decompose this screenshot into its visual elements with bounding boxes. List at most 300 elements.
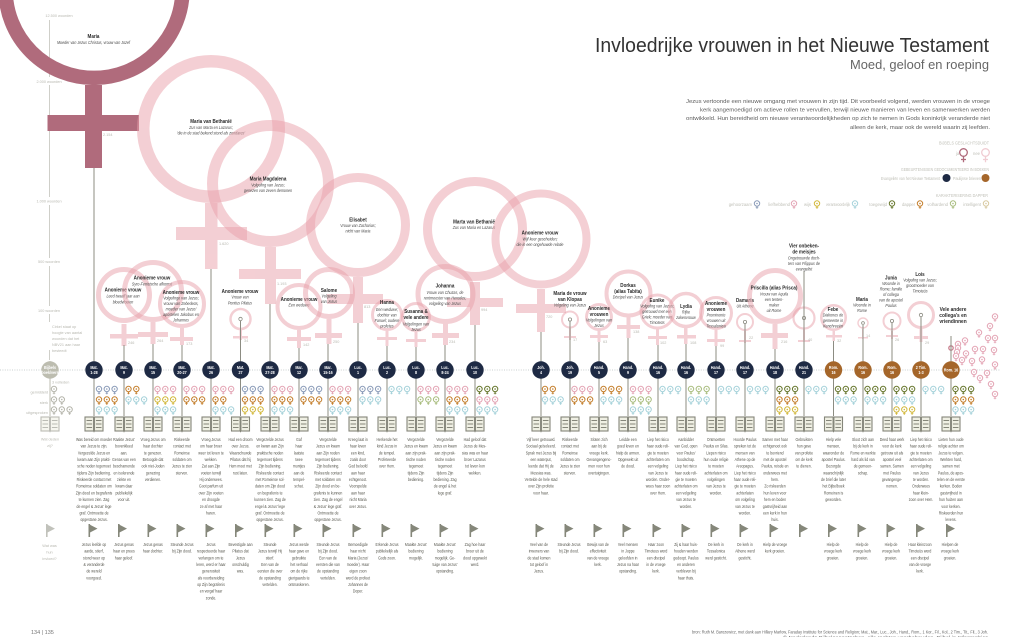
symbol: Salome bbox=[306, 270, 352, 344]
actions text: religie achter om bbox=[938, 443, 964, 449]
symbol: Anonieme vrouwen (Hand. 5): Jezus bbox=[593, 323, 604, 328]
impact text: van de vroege bbox=[909, 561, 932, 567]
symbol: Susanna en vele andere vrouwen: Susanna & bbox=[404, 309, 428, 315]
actions text: schap. bbox=[858, 470, 868, 476]
symbol: Lois: Lois bbox=[915, 272, 925, 278]
impact text: groeien. bbox=[944, 555, 956, 561]
column: Joh. 4: 4 bbox=[540, 370, 543, 375]
actions text: van Jezus te bbox=[676, 497, 696, 502]
actions text: apostel Paulus. bbox=[822, 456, 845, 462]
actions text: de tempel. bbox=[379, 450, 395, 456]
actions text: ze af met haar bbox=[200, 503, 223, 509]
symbol: Anonieme vrouw (Pilatus): Vrouw van bbox=[231, 294, 249, 300]
symbol: Anonieme vrouw (Mat. 9): bloedvloeien bbox=[113, 299, 134, 305]
actions text: genezing bbox=[146, 470, 161, 476]
symbol: Anonieme vrouw (Pilatus): 34 bbox=[244, 339, 248, 343]
impact text: Maakte Jezus' bbox=[434, 541, 456, 547]
symbol: Febe: gemeente in bbox=[823, 318, 844, 323]
actions text: Liep het risico bbox=[910, 436, 932, 442]
actions text: sterven. bbox=[564, 470, 576, 476]
impact text: Hielpen de bbox=[942, 541, 959, 547]
column: Luc. 2 bbox=[375, 346, 410, 561]
actions text: graf. Ontmoette de bbox=[255, 510, 285, 516]
column: Hand. 21: 21 bbox=[802, 370, 807, 375]
symbol: Maria de vrouw van Klopas bbox=[553, 291, 587, 342]
symbol: Anonieme vrouwen (Hand. 17): vrouwen bbox=[707, 307, 725, 313]
actions text: Sloot zich aan bbox=[852, 436, 874, 442]
actions text: tegemoet bbox=[409, 463, 424, 469]
actions text: hem. bbox=[771, 476, 779, 482]
actions text: haar bbox=[296, 443, 303, 449]
actions text: kind Jezus in bbox=[377, 443, 398, 449]
symbol: Maria Magdalena: genezen van zeven demonen bbox=[244, 188, 293, 193]
impact text: de wereld bbox=[86, 568, 102, 574]
actions text: praktische noden bbox=[257, 450, 284, 456]
column: Hand. 21: Hand. bbox=[799, 365, 809, 370]
column: Luc. 10: 10 bbox=[473, 370, 478, 375]
impact text: Johannes de bbox=[348, 581, 369, 587]
actions text: Riskeerde contact met bbox=[77, 476, 112, 482]
word-count axis: hoogte van aantal bbox=[52, 331, 82, 335]
actions text: tegemoet tijdens bbox=[315, 456, 341, 462]
column: Mat. 20-27 bbox=[170, 345, 205, 554]
actions text: Hem moet met bbox=[229, 463, 253, 469]
impact text: Timoteüs werd bbox=[909, 548, 932, 554]
actions text: Liep het risico bbox=[675, 463, 697, 469]
symbol: Vier onbekende meisjes: Ongetrouwde doch- bbox=[788, 255, 821, 261]
legend symbols: ja / nee: ja bbox=[955, 151, 960, 156]
symbol: Maria: 2.154 bbox=[103, 133, 113, 137]
symbol: Johanna: rentmeester van Herodes; bbox=[424, 295, 467, 301]
actions text: over Hem. bbox=[650, 490, 666, 496]
legend heading: bron: GEBEURTENISSEN GEDOCUMENTEERD IN BOEKEN bbox=[901, 167, 989, 172]
symbol: Marta van Bethanië bbox=[428, 182, 522, 325]
actions text: weer tot leven te bbox=[198, 450, 224, 456]
impact text: het verhaal bbox=[290, 561, 308, 567]
actions text: Sprak met Jezus bij bbox=[526, 450, 556, 456]
impact text: groeien. bbox=[885, 555, 897, 561]
symbol: Marta van Bethanië: Marta van Bethanië bbox=[453, 219, 495, 226]
actions text: van God, open bbox=[675, 443, 698, 449]
impact text: zonde. bbox=[206, 595, 216, 601]
actions text: om de kerk bbox=[795, 456, 813, 462]
actions text: te dienen. bbox=[796, 463, 812, 469]
symbol: Febe bbox=[821, 305, 846, 343]
actions text: te worden. bbox=[913, 476, 929, 482]
impact text: groeien. bbox=[856, 555, 868, 561]
actions text: Leidde een bbox=[619, 436, 637, 442]
symbol: Elisabet: nicht van Maria bbox=[346, 228, 371, 234]
column: Mat. 27-28: Mat. bbox=[266, 365, 274, 370]
symbol: Vier onbekende meisjes: 40 bbox=[808, 338, 812, 342]
column: Hand. 9: 9 bbox=[627, 370, 630, 375]
symbol: Junia: of collega bbox=[883, 292, 899, 297]
impact text: vertelden. bbox=[262, 581, 278, 587]
legend: bronnen: Paulijnse brieven bbox=[953, 176, 982, 181]
symbol: Anonieme vrouwen (Hand. 5) bbox=[586, 304, 613, 344]
symbol: Anonieme vrouw (Joh. 4): die in een ongehuwde relatie bbox=[517, 242, 564, 247]
symbol: Anonieme vrouw (Pilatus): Pontius Pilatus bbox=[228, 300, 252, 306]
actions text: Vergezelde bbox=[436, 436, 454, 442]
impact text: mogelijk. bbox=[409, 555, 423, 561]
symbol: Anonieme vrouw (Mat. 20): Anonieme vrouw bbox=[163, 290, 200, 296]
symbol: Anonieme vrouwen (Hand. 17): 99 bbox=[720, 344, 724, 348]
symbol: Maria van Bethanië: 'die in de stad bekend stond als zondares' bbox=[177, 130, 245, 136]
actions text: Pilatus dat hij bbox=[230, 456, 251, 462]
actions text: laatste bbox=[294, 450, 305, 456]
actions text: Sloten zich bbox=[590, 436, 608, 442]
actions text: & Jezus' lege graf. bbox=[314, 503, 342, 509]
word-count axis: woorden dat het bbox=[52, 337, 80, 341]
impact text: Zag hoe haar bbox=[465, 541, 486, 547]
actions text: spreken tot de bbox=[734, 443, 757, 449]
symbol: Lydia: 108 bbox=[690, 341, 696, 345]
symbol: Maria van Bethanië: Zus van Marta en Lazarus; bbox=[188, 125, 234, 130]
actions text: beschamende bbox=[113, 463, 135, 469]
symbol: Junia: Woonde in bbox=[882, 281, 900, 286]
actions text: mensen van bbox=[736, 450, 755, 456]
column: Luc. 8-24 bbox=[433, 345, 468, 574]
actions text: bij de kerk in bbox=[853, 443, 873, 449]
actions text: Raakte Jezus' bbox=[113, 436, 135, 442]
actions text: Jezus te zien bbox=[172, 463, 193, 469]
column: Hand. 17 (Damaris): Hand. bbox=[740, 365, 750, 370]
column: Mat. 26: 26 bbox=[209, 370, 214, 375]
symbol: Anonieme vrouw (Mat. 20): 173 bbox=[186, 342, 192, 346]
actions text: van Jezus te bbox=[706, 483, 726, 489]
actions text: echtgenoot. bbox=[349, 476, 367, 482]
actions text: geworden. bbox=[825, 497, 842, 502]
impact text: kerk. bbox=[652, 568, 660, 574]
actions text: Jezus en kwam bbox=[316, 443, 340, 449]
actions text: tische noden bbox=[406, 456, 426, 462]
impact text: werd. bbox=[471, 561, 479, 567]
actions text: hun gave bbox=[797, 443, 812, 449]
impact text: was. bbox=[237, 568, 244, 574]
impact text: haar dochter. bbox=[143, 548, 163, 554]
actions text: hard als lid van bbox=[851, 456, 875, 462]
symbol: Damaris bbox=[736, 298, 754, 343]
actions text: men voor hun bbox=[588, 463, 610, 469]
column: Hand. 17 (Damaris) bbox=[733, 324, 768, 561]
column: Hand. 5 bbox=[586, 342, 622, 567]
actions text: Was bereid om moeder bbox=[76, 436, 113, 442]
actions text: contact met bbox=[173, 443, 192, 449]
symbol: Maria Magdalena: Maria Magdalena bbox=[250, 176, 286, 183]
impact text: kerk. bbox=[594, 561, 602, 567]
legend column: uitleg iconen: Wat deden bbox=[41, 438, 59, 442]
actions text: hem en boden bbox=[764, 497, 787, 502]
symbol: Hanna: Hanna bbox=[380, 300, 394, 306]
impact text: houden werden bbox=[674, 548, 699, 554]
impact text: bij Zijn dood. bbox=[172, 548, 192, 554]
actions text: en isolerende bbox=[114, 470, 135, 476]
actions text: tempel- bbox=[293, 476, 305, 482]
column: Mat. 15: 15 bbox=[151, 370, 156, 375]
impact text: Hielp de bbox=[885, 541, 898, 547]
symbol: Maria de vrouw van Klopas: Maria de vrouw bbox=[553, 291, 587, 297]
column: Rom. 16 (Junia) bbox=[880, 323, 915, 561]
actions text: van profetie bbox=[795, 450, 814, 456]
impact text: Jezus na haar bbox=[617, 561, 639, 567]
impact text: Veel van de bbox=[530, 541, 549, 547]
actions text: Jezus te zien bbox=[560, 463, 581, 469]
column: Hand. 18: 18 bbox=[773, 370, 778, 375]
actions text: Rome en werkte bbox=[850, 450, 876, 456]
actions text: nicht Maria bbox=[349, 497, 367, 502]
actions text: Riskeerde bbox=[562, 436, 578, 442]
actions text: een volgeling bbox=[648, 463, 669, 469]
actions text: aan haar bbox=[351, 470, 365, 476]
legend column: uitleg iconen: zij? bbox=[47, 444, 53, 448]
actions text: van Jezus te zijn. bbox=[81, 443, 107, 449]
actions text: aan haar bbox=[351, 490, 365, 496]
actions text: over Jezus. bbox=[349, 503, 367, 509]
impact text: vroege kerk bbox=[824, 548, 843, 554]
column: Mat. 27: 27 bbox=[238, 370, 243, 375]
impact text: als voorbereiding bbox=[198, 575, 225, 581]
actions text: Zijn dood en be- bbox=[315, 483, 341, 489]
symbol: Anonieme vrouw (Mat. 15) bbox=[124, 262, 182, 344]
actions text: Liep het risico bbox=[734, 470, 756, 476]
symbol: Hanna: profetes bbox=[379, 323, 394, 329]
symbol: Eunike: 102 bbox=[660, 341, 666, 345]
impact text: Steunde Jezus bbox=[316, 541, 340, 547]
actions text: aan zijn prak- bbox=[406, 450, 427, 456]
actions text: waarschijnlijk bbox=[823, 470, 845, 476]
column: Hand. 17 (vrouwen): 17 bbox=[714, 370, 719, 375]
actions text: Betoogde dat bbox=[143, 456, 164, 462]
actions text: te bevriend bbox=[766, 450, 784, 456]
actions text: kwam daar bbox=[115, 483, 133, 489]
word-count axis: Cirkel staat op bbox=[52, 325, 76, 329]
impact text: Jezus werde bbox=[289, 541, 309, 547]
symbol: Dorkas: Discipel van Jezus bbox=[613, 294, 643, 300]
symbol: Junia: van de apostel bbox=[879, 297, 904, 303]
column: 2 Tim. 1-3: 1-3 bbox=[918, 370, 924, 375]
column: Rom. 16 (vele anderen): Rom. 16 bbox=[944, 367, 959, 373]
actions text: met Romeinse sol- bbox=[255, 476, 285, 482]
actions text: grafenis te kunnen bbox=[314, 490, 343, 496]
actions text: een volgeling bbox=[676, 490, 697, 496]
actions text: engel & Jezus' lege bbox=[255, 503, 286, 509]
symbol: Junia: Rome; familie bbox=[880, 286, 903, 292]
symbol: Maria de vrouw van Klopas: Volgeling van Jezus bbox=[554, 302, 586, 308]
symbol: Maria Magdalena: 1.193 bbox=[277, 282, 287, 286]
impact text: bij Zijn dood. bbox=[559, 548, 579, 554]
symbol: Maria van Bethanië: 1.620 bbox=[219, 242, 229, 246]
actions text: God beloofd bbox=[348, 463, 368, 469]
actions text: bediening. Zag bbox=[433, 476, 457, 482]
actions text: apostel veel bbox=[883, 456, 901, 462]
symbol: Vier onbekende meisjes: de meisjes bbox=[792, 249, 816, 256]
actions text: hun leven voor bbox=[764, 490, 787, 496]
column: Rom. 16 (Febe) bbox=[821, 341, 856, 561]
column: Mar. 15-16: Mar. bbox=[324, 365, 332, 370]
actions text: Zijn bediening. bbox=[317, 463, 339, 469]
symbol: Maria (Rom. 16) bbox=[853, 297, 871, 339]
column: Mat. 15 bbox=[140, 344, 176, 554]
symbol: Susanna en vele andere vrouwen: vele andere bbox=[403, 315, 429, 321]
word-count axis: 500 woorden bbox=[38, 260, 60, 264]
actions text: haar oude reli- bbox=[675, 470, 698, 476]
symbol: Elisabet: Vrouw van Zacharias; bbox=[340, 223, 376, 228]
column: Mat. 1-28 bbox=[76, 168, 117, 581]
symbol: Maria (Rom. 16): 14 bbox=[866, 334, 870, 338]
actions text: broer Lazarus bbox=[464, 456, 486, 462]
impact text: mogelijk. Ge- bbox=[435, 555, 456, 561]
column: Luc. 1: Luc. bbox=[354, 365, 362, 370]
symbol: Maria (Rom. 16): Woonde in bbox=[853, 302, 871, 308]
actions text: Romeinse bbox=[562, 450, 578, 456]
symbol: Hanna: Fanuel; oudere bbox=[375, 318, 400, 323]
actions text: aan Zijn noden bbox=[316, 450, 340, 456]
actions text: worden. bbox=[710, 490, 722, 496]
actions text: Gebruikten bbox=[795, 436, 813, 442]
symbol: Anonieme vrouw (Mat. 20): vrouw van Zebedeüs, bbox=[163, 301, 199, 306]
symbol: Anonieme vrouw (Joh. 4): Anonieme vrouw bbox=[522, 230, 559, 237]
impact text: eersten die over bbox=[257, 568, 283, 574]
column: Hand. 16 (Lydia) bbox=[673, 344, 709, 581]
symbol: Anonieme vrouw (Joh. 4) bbox=[496, 194, 586, 332]
symbol: Priscilla: een tenten- bbox=[765, 297, 784, 302]
symbol: Anonieme vrouw (Mat. 9): Leed twaalf jaar aan bbox=[106, 293, 140, 299]
actions text: Vijf keer getrouwd. bbox=[527, 436, 555, 442]
column: Rom. 16 (Febe): 16 bbox=[831, 370, 836, 375]
actions text: Jezus te volgen. bbox=[938, 450, 964, 456]
impact text: Pilatus dat bbox=[232, 548, 249, 554]
column: Hand. 17 (Damaris): 17 bbox=[743, 370, 748, 375]
legend column: uitleg iconen: gemiddeld bbox=[30, 390, 48, 394]
symbol: Maria bbox=[6, 0, 182, 168]
symbol: Lois: Volgeling van Jezus; bbox=[903, 277, 938, 283]
actions text: met Paulus bbox=[883, 470, 901, 476]
actions text: Goot parfum uit bbox=[199, 483, 224, 489]
impact text: vroege kerk bbox=[882, 548, 901, 554]
symbol: Johanna: Johanna bbox=[436, 283, 454, 290]
subtitle: Moed, geloof en roeping bbox=[850, 57, 989, 72]
impact text: Jezus bbox=[236, 555, 245, 561]
actions text: Bezorgde bbox=[826, 463, 842, 469]
impact text: moeder). Haar bbox=[347, 561, 370, 567]
actions text: de engel & Jezus' lege bbox=[77, 503, 112, 509]
symbol: Damaris: Damaris bbox=[736, 298, 754, 304]
actions text: waaronder de bbox=[823, 450, 845, 456]
actions text: voor Paulus' bbox=[676, 450, 696, 456]
column: Luc. 2: 2 bbox=[386, 370, 389, 375]
impact text: vroege kerk bbox=[853, 548, 872, 554]
intro text: alleen de kerk, maar ook de wereld waarin zij leefden. bbox=[850, 125, 990, 131]
column: Mat. 20-27: Mat. bbox=[178, 365, 186, 370]
column: Hand. 17 (vrouwen): Hand. bbox=[711, 365, 721, 370]
symbol: Febe: Kenchreeën bbox=[823, 323, 844, 329]
impact text: gedoopt. Paulus bbox=[673, 555, 699, 561]
symbol: Elisabet bbox=[310, 178, 406, 323]
symbol: Anonieme vrouwen (Hand. 17) bbox=[700, 298, 732, 348]
impact text: werd de profeet bbox=[346, 575, 371, 581]
actions text: muntjes bbox=[293, 463, 305, 469]
symbol: Anonieme vrouw (Mat. 9) bbox=[98, 270, 150, 346]
symbol: Maria: Maria bbox=[88, 34, 100, 40]
column: Hand. 21 bbox=[795, 271, 827, 537]
legend: karaktertrekken: toegewijd bbox=[869, 202, 888, 207]
actions text: tot leven kon bbox=[465, 463, 485, 469]
actions text: Opgewekt uit bbox=[618, 456, 639, 462]
actions text: een waterput, bbox=[530, 456, 552, 462]
actions text: Riskeerden hun bbox=[939, 510, 964, 516]
actions text: gie te moeten bbox=[734, 483, 756, 489]
column: Rom. 16 (Junia): 16 bbox=[890, 370, 895, 375]
actions text: sche noden tegemoet bbox=[77, 463, 111, 469]
column: Mat. 1-28: Mat. bbox=[90, 365, 98, 370]
word-count axis: 2.000 woorden bbox=[36, 80, 62, 84]
symbol: Dorkas: (alias Tabita) bbox=[614, 289, 642, 295]
actions text: over Zijn voeten bbox=[199, 490, 224, 496]
symbol: Johanna: Vrouw van Chuzas, de bbox=[427, 290, 464, 295]
impact text: een discipel bbox=[647, 555, 665, 561]
column: Mat. 1-28: 1-28 bbox=[90, 370, 98, 375]
impact text: Haar zoon bbox=[648, 541, 665, 547]
actions text: opgestane Jezus. bbox=[80, 517, 108, 522]
actions text: publiekelijk bbox=[115, 490, 133, 496]
column: Luc. 8: 8 bbox=[415, 370, 418, 375]
symbol: Vele andere collega's en vriendinnen: vriendinnen bbox=[939, 319, 967, 325]
impact text: haar en prees bbox=[113, 548, 135, 554]
actions text: bediening. bbox=[408, 476, 424, 482]
column: Mat. 9 bbox=[112, 345, 147, 561]
symbol: Priscilla bbox=[750, 270, 800, 349]
actions text: overtuigingen. bbox=[588, 470, 610, 476]
actions text: telen en de eerste bbox=[937, 476, 965, 482]
column: Hand. 5: Hand. bbox=[594, 365, 604, 370]
impact text: bediening bbox=[408, 548, 424, 554]
symbol: Vier onbekende meisjes bbox=[788, 243, 821, 342]
actions text: Gaf bbox=[296, 436, 302, 442]
actions text: gie te moeten bbox=[647, 450, 669, 456]
impact text: Haar kleinzoon bbox=[908, 541, 932, 547]
symbol: Junia: 26 bbox=[895, 338, 899, 342]
impact text: in de vroege bbox=[646, 561, 666, 567]
actions text: Samen met haar bbox=[762, 436, 788, 442]
impact text: haar geloof. bbox=[115, 555, 133, 561]
impact text: Jezus bbox=[206, 541, 216, 547]
actions text: boodschap. bbox=[677, 456, 695, 462]
symbol: Anonieme vrouw (Mat. 9): Anonieme vrouw bbox=[105, 287, 142, 294]
impact text: Jezus genas bbox=[114, 541, 134, 547]
impact text: om de rijke bbox=[290, 568, 308, 574]
actions text: Waarschuwde bbox=[230, 450, 252, 456]
impact text: eigen zoon bbox=[349, 568, 367, 574]
actions text: van Jezus te bbox=[648, 470, 668, 476]
actions text: de brief die later bbox=[821, 476, 846, 482]
actions text: en kwam aan Zijn bbox=[256, 443, 284, 449]
legend symbols: ja / nee: nee bbox=[973, 151, 981, 156]
actions text: wees haar zoon bbox=[646, 483, 671, 489]
actions text: Sociaal geïsoleerd. bbox=[526, 443, 556, 449]
actions text: tijdens Zijn bbox=[408, 470, 425, 476]
symbol: Anonieme vrouw (weduwe): 142 bbox=[303, 343, 309, 347]
column: Mar. 12 bbox=[288, 348, 322, 587]
impact text: generositeit bbox=[202, 568, 221, 574]
symbol: Anonieme vrouwen (Hand. 5): vrouwen bbox=[590, 312, 608, 318]
actions text: haar oude reli- bbox=[734, 476, 757, 482]
actions text: zien. Zag de engel bbox=[314, 497, 342, 502]
actions text: achterlaten om bbox=[909, 456, 933, 462]
actions text: voor uit. bbox=[118, 497, 130, 502]
impact text: gesticht. bbox=[739, 555, 751, 561]
legend: karaktertrekken: verantwoordelijk bbox=[826, 202, 851, 207]
actions text: Messias was. bbox=[531, 470, 551, 476]
